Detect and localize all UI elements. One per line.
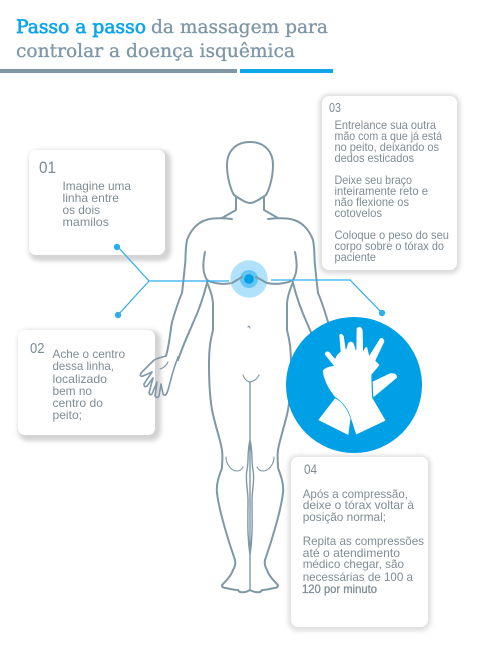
left arm and torso (166, 218, 232, 356)
step 02 text (30, 340, 125, 422)
step 03 text: corpo sobre o tórax do (334, 239, 444, 253)
right arm (268, 218, 334, 356)
step 01 text: 01 (39, 158, 56, 177)
connector lines (114, 244, 385, 318)
step 04 text: 120 por minuto (302, 582, 377, 596)
step 04 text: necessárias de 100 a (303, 570, 413, 584)
step 03 text: não flexione os (334, 195, 409, 209)
step 04 text: até o atendimento (303, 546, 400, 560)
step 01 text (39, 158, 131, 229)
head (227, 142, 273, 203)
card background 01 (29, 150, 165, 255)
title: da massagem para (151, 16, 328, 38)
step 02 text: dessa linha, (52, 359, 114, 373)
step 03 text (329, 100, 449, 264)
chest (203, 252, 297, 284)
step 03 text: Deixe seu braço (334, 173, 412, 187)
card background 04 (291, 457, 428, 627)
step 04 text: Após a compressão, (303, 487, 408, 501)
step 04 text: deixe o tórax voltar à (303, 498, 414, 512)
step 01 text: Imagine uma (62, 179, 131, 193)
title: Passo a passo (16, 16, 146, 38)
human body outline (140, 142, 334, 592)
step 03 text: cotovelos (334, 206, 382, 220)
step 04 text: médico chegar, são (303, 557, 404, 571)
hand (140, 356, 178, 398)
chest target marker (230, 260, 268, 298)
step 02 text: 02 (30, 340, 44, 357)
title (16, 16, 328, 62)
step 03 text: dedos esticados (334, 151, 414, 165)
navel, groin, knees (226, 326, 274, 471)
torso sides and legs (207, 282, 250, 592)
step 03 text: mão com a que já está (334, 129, 442, 143)
step 04 text (302, 461, 424, 596)
step 04 text: posição normal; (303, 510, 386, 524)
step 03 text: no peito, deixando os (334, 140, 439, 154)
step 03 text: inteiramente reto e (334, 184, 428, 198)
title: controlar a doença isquêmica (16, 40, 295, 62)
step 02 text: Ache o centro (52, 347, 125, 361)
step 02 text: bem no (52, 384, 92, 398)
card background 03 (322, 96, 457, 270)
card background 02 (18, 330, 155, 435)
step 02 text: localizado (52, 372, 107, 386)
neck and shoulders (222, 197, 278, 218)
step 03 text: Entrelance sua outra (334, 118, 436, 132)
step 04 text: 04 (304, 461, 317, 477)
step 01 text: mamilos (62, 215, 109, 229)
step 03 text: Coloque o peso do seu (334, 228, 449, 242)
step 04 text: Repita as compressões (303, 534, 424, 548)
centre leg line (246, 382, 254, 590)
step 03 text: 03 (329, 100, 341, 115)
title underline (0, 69, 333, 73)
step 03 text: paciente (334, 250, 376, 264)
step 02 text: peito; (52, 408, 82, 422)
icon: hands on blue circle (286, 317, 422, 453)
step 01 text: os dois (62, 203, 100, 217)
step 01 text: linha entre (62, 191, 119, 205)
step 02 text: centro do (52, 396, 103, 410)
